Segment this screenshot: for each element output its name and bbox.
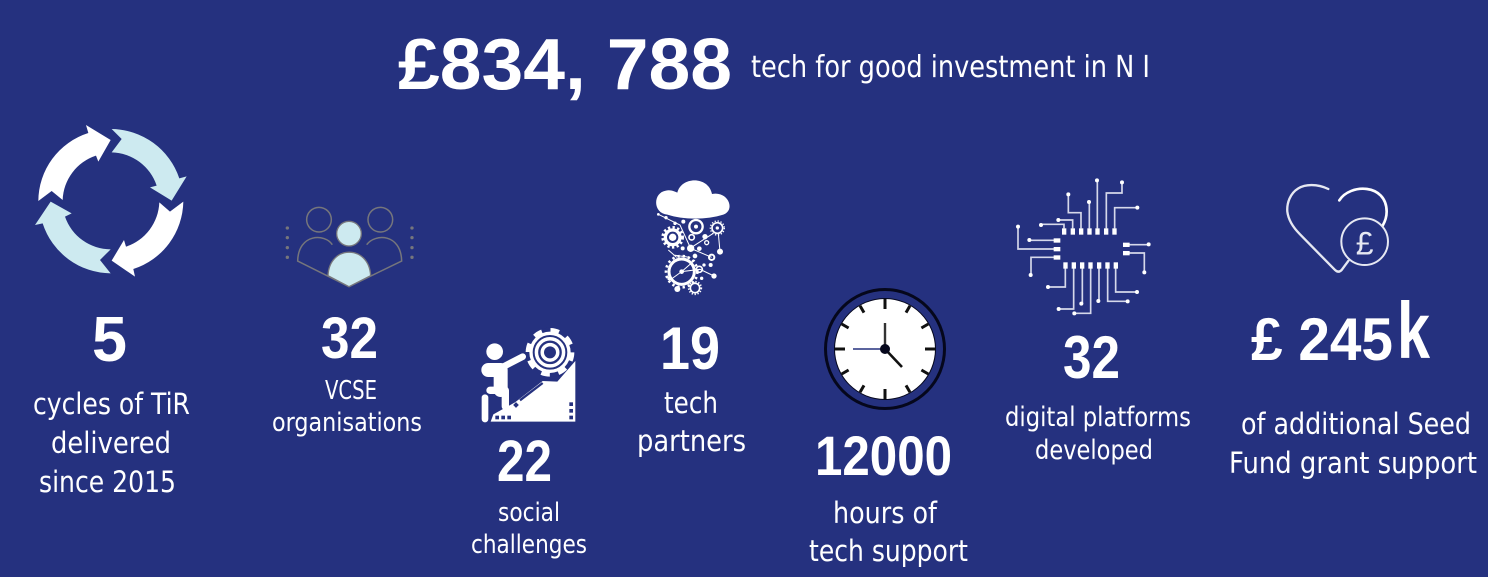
label: cycles of TiR delivered since 2015 (33, 387, 190, 499)
label: hours of tech support (809, 496, 968, 568)
label: tech partners: tech (664, 386, 718, 420)
label: social challenges (471, 498, 587, 560)
label: of additional Seed Fund grant support (1229, 407, 1477, 480)
icon: person climbing to gear (485, 328, 575, 422)
label: digital platforms developed: developed (1035, 435, 1153, 466)
label: VCSE organisations: organisations (272, 408, 422, 438)
icon: heart with pound coin: £ (1356, 225, 1374, 261)
label: hours of tech support: tech support (809, 534, 968, 568)
number: 19: 19 (660, 315, 720, 382)
label: hours of tech support: hours of (833, 496, 938, 530)
number: 5: 5 (92, 303, 127, 375)
panel: digital platforms (1005, 178, 1191, 466)
number: 32: 32 (1063, 324, 1120, 391)
number: £ 245k: £ 245 (1251, 306, 1393, 373)
number: 22: 22 (497, 429, 552, 494)
title: investment headline: tech for good investment in N I (751, 50, 1150, 85)
number: £ 245k (1251, 286, 1430, 375)
label: tech partners: partners (637, 424, 746, 458)
title: investment headline: £834, 788 (398, 25, 732, 105)
label: tech partners (637, 386, 746, 458)
panel: seed fund grant support (1229, 185, 1477, 480)
icon: clock (824, 288, 946, 410)
number: 12000: 12000 (815, 424, 952, 487)
panel: social challenges (471, 328, 587, 560)
panel: cycles of TiR (33, 125, 190, 499)
label: digital platforms developed (1005, 402, 1191, 466)
label: social challenges: challenges (471, 530, 587, 560)
icon: circuit chip (1016, 178, 1151, 315)
icon: group of people (286, 207, 414, 287)
icon: cloud with gears (656, 180, 730, 294)
panel: tech partners (637, 180, 746, 458)
label: social challenges: social (498, 498, 560, 528)
label: cycles of TiR delivered since 2015: cycles of TiR (33, 387, 190, 421)
number: £ 245k: k (1397, 286, 1430, 375)
title: investment headline (398, 25, 1150, 105)
label: digital platforms developed: digital platforms (1005, 402, 1191, 433)
icon: circular arrows (35, 125, 187, 277)
panel: tech support hours (809, 288, 968, 568)
panel: VCSE organisations (272, 207, 422, 438)
number: 32: 32 (321, 306, 378, 371)
label: cycles of TiR delivered since 2015: since 2015 (39, 465, 176, 499)
icon: heart with pound coin (1287, 185, 1388, 272)
label: VCSE organisations: VCSE (325, 376, 377, 406)
label: VCSE organisations (272, 376, 422, 438)
label: cycles of TiR delivered since 2015: delivered (51, 426, 171, 460)
